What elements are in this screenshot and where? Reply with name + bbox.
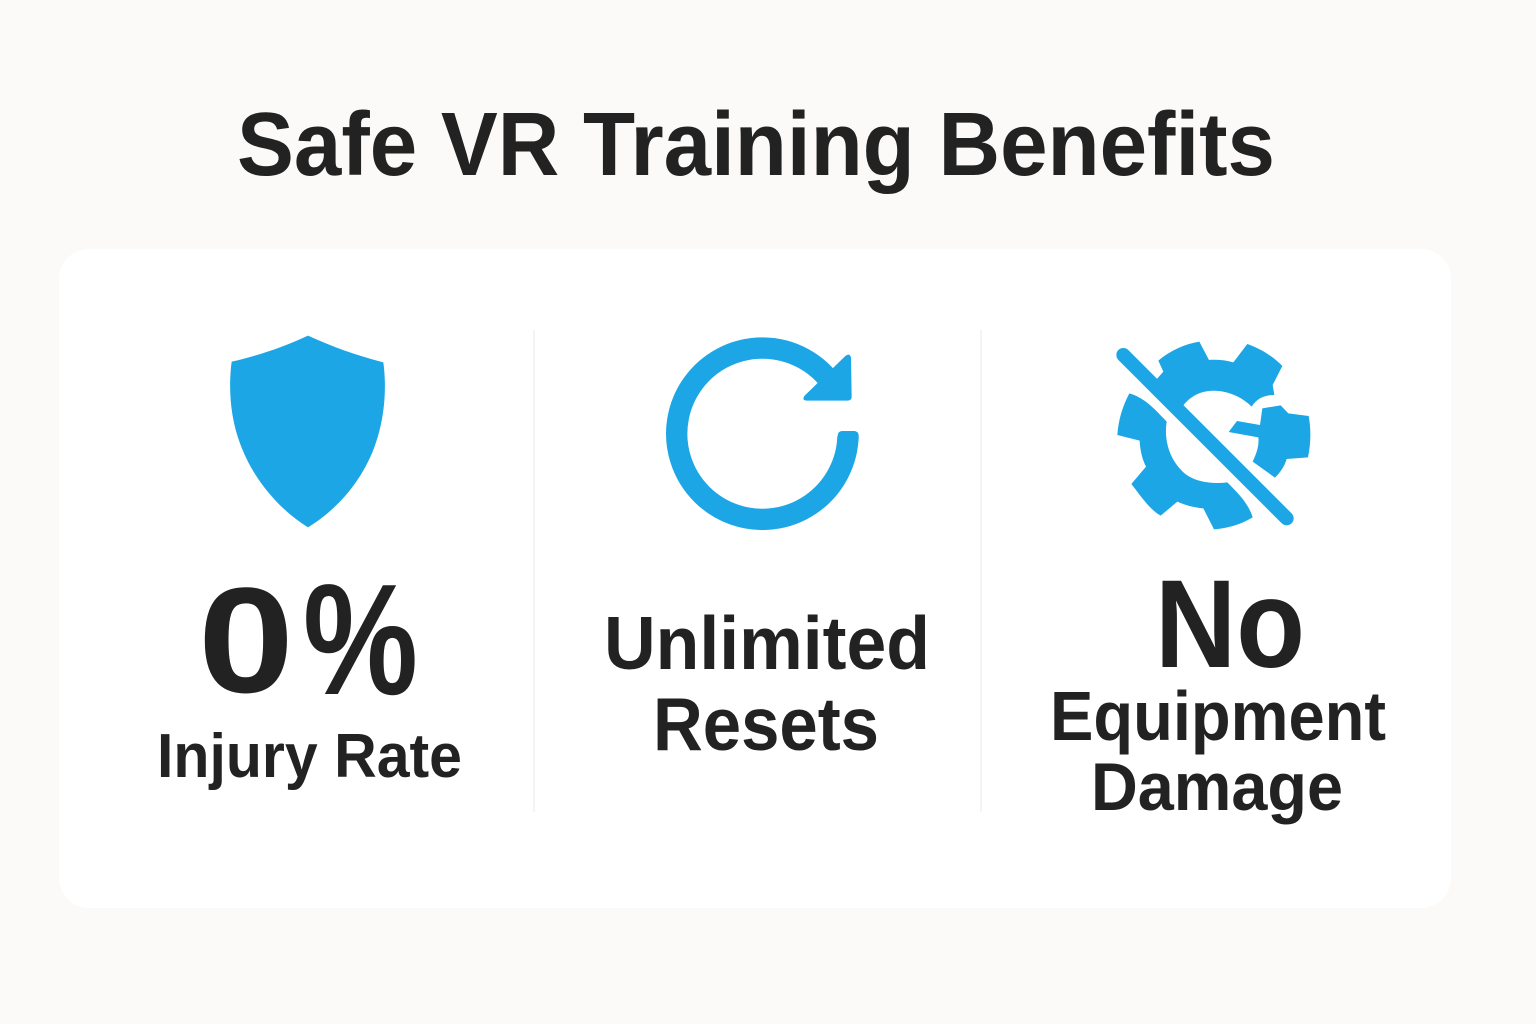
icon: shield	[230, 336, 385, 527]
label: equipment: Equipment	[1050, 677, 1386, 755]
column: no equipment damage	[1050, 342, 1386, 825]
label: resets: Resets	[653, 682, 879, 766]
label: injury rate: Injury Rate	[157, 722, 462, 791]
stat: no: No	[1155, 555, 1305, 694]
title: Safe VR Training Benefits	[237, 95, 1275, 195]
column: zero injury rate	[157, 336, 462, 791]
stat: 0%: %	[303, 552, 418, 728]
label: unlimited: Unlimited	[604, 601, 930, 685]
icon: crossed-out broken gear	[1117, 342, 1310, 529]
column: unlimited resets	[604, 348, 930, 766]
label: damage: Damage	[1091, 749, 1343, 825]
panel: benefits card	[59, 249, 1451, 908]
stat: 0%	[198, 552, 418, 728]
stat: 0%: 0	[198, 556, 294, 724]
icon: circular reset arrow	[677, 348, 859, 519]
